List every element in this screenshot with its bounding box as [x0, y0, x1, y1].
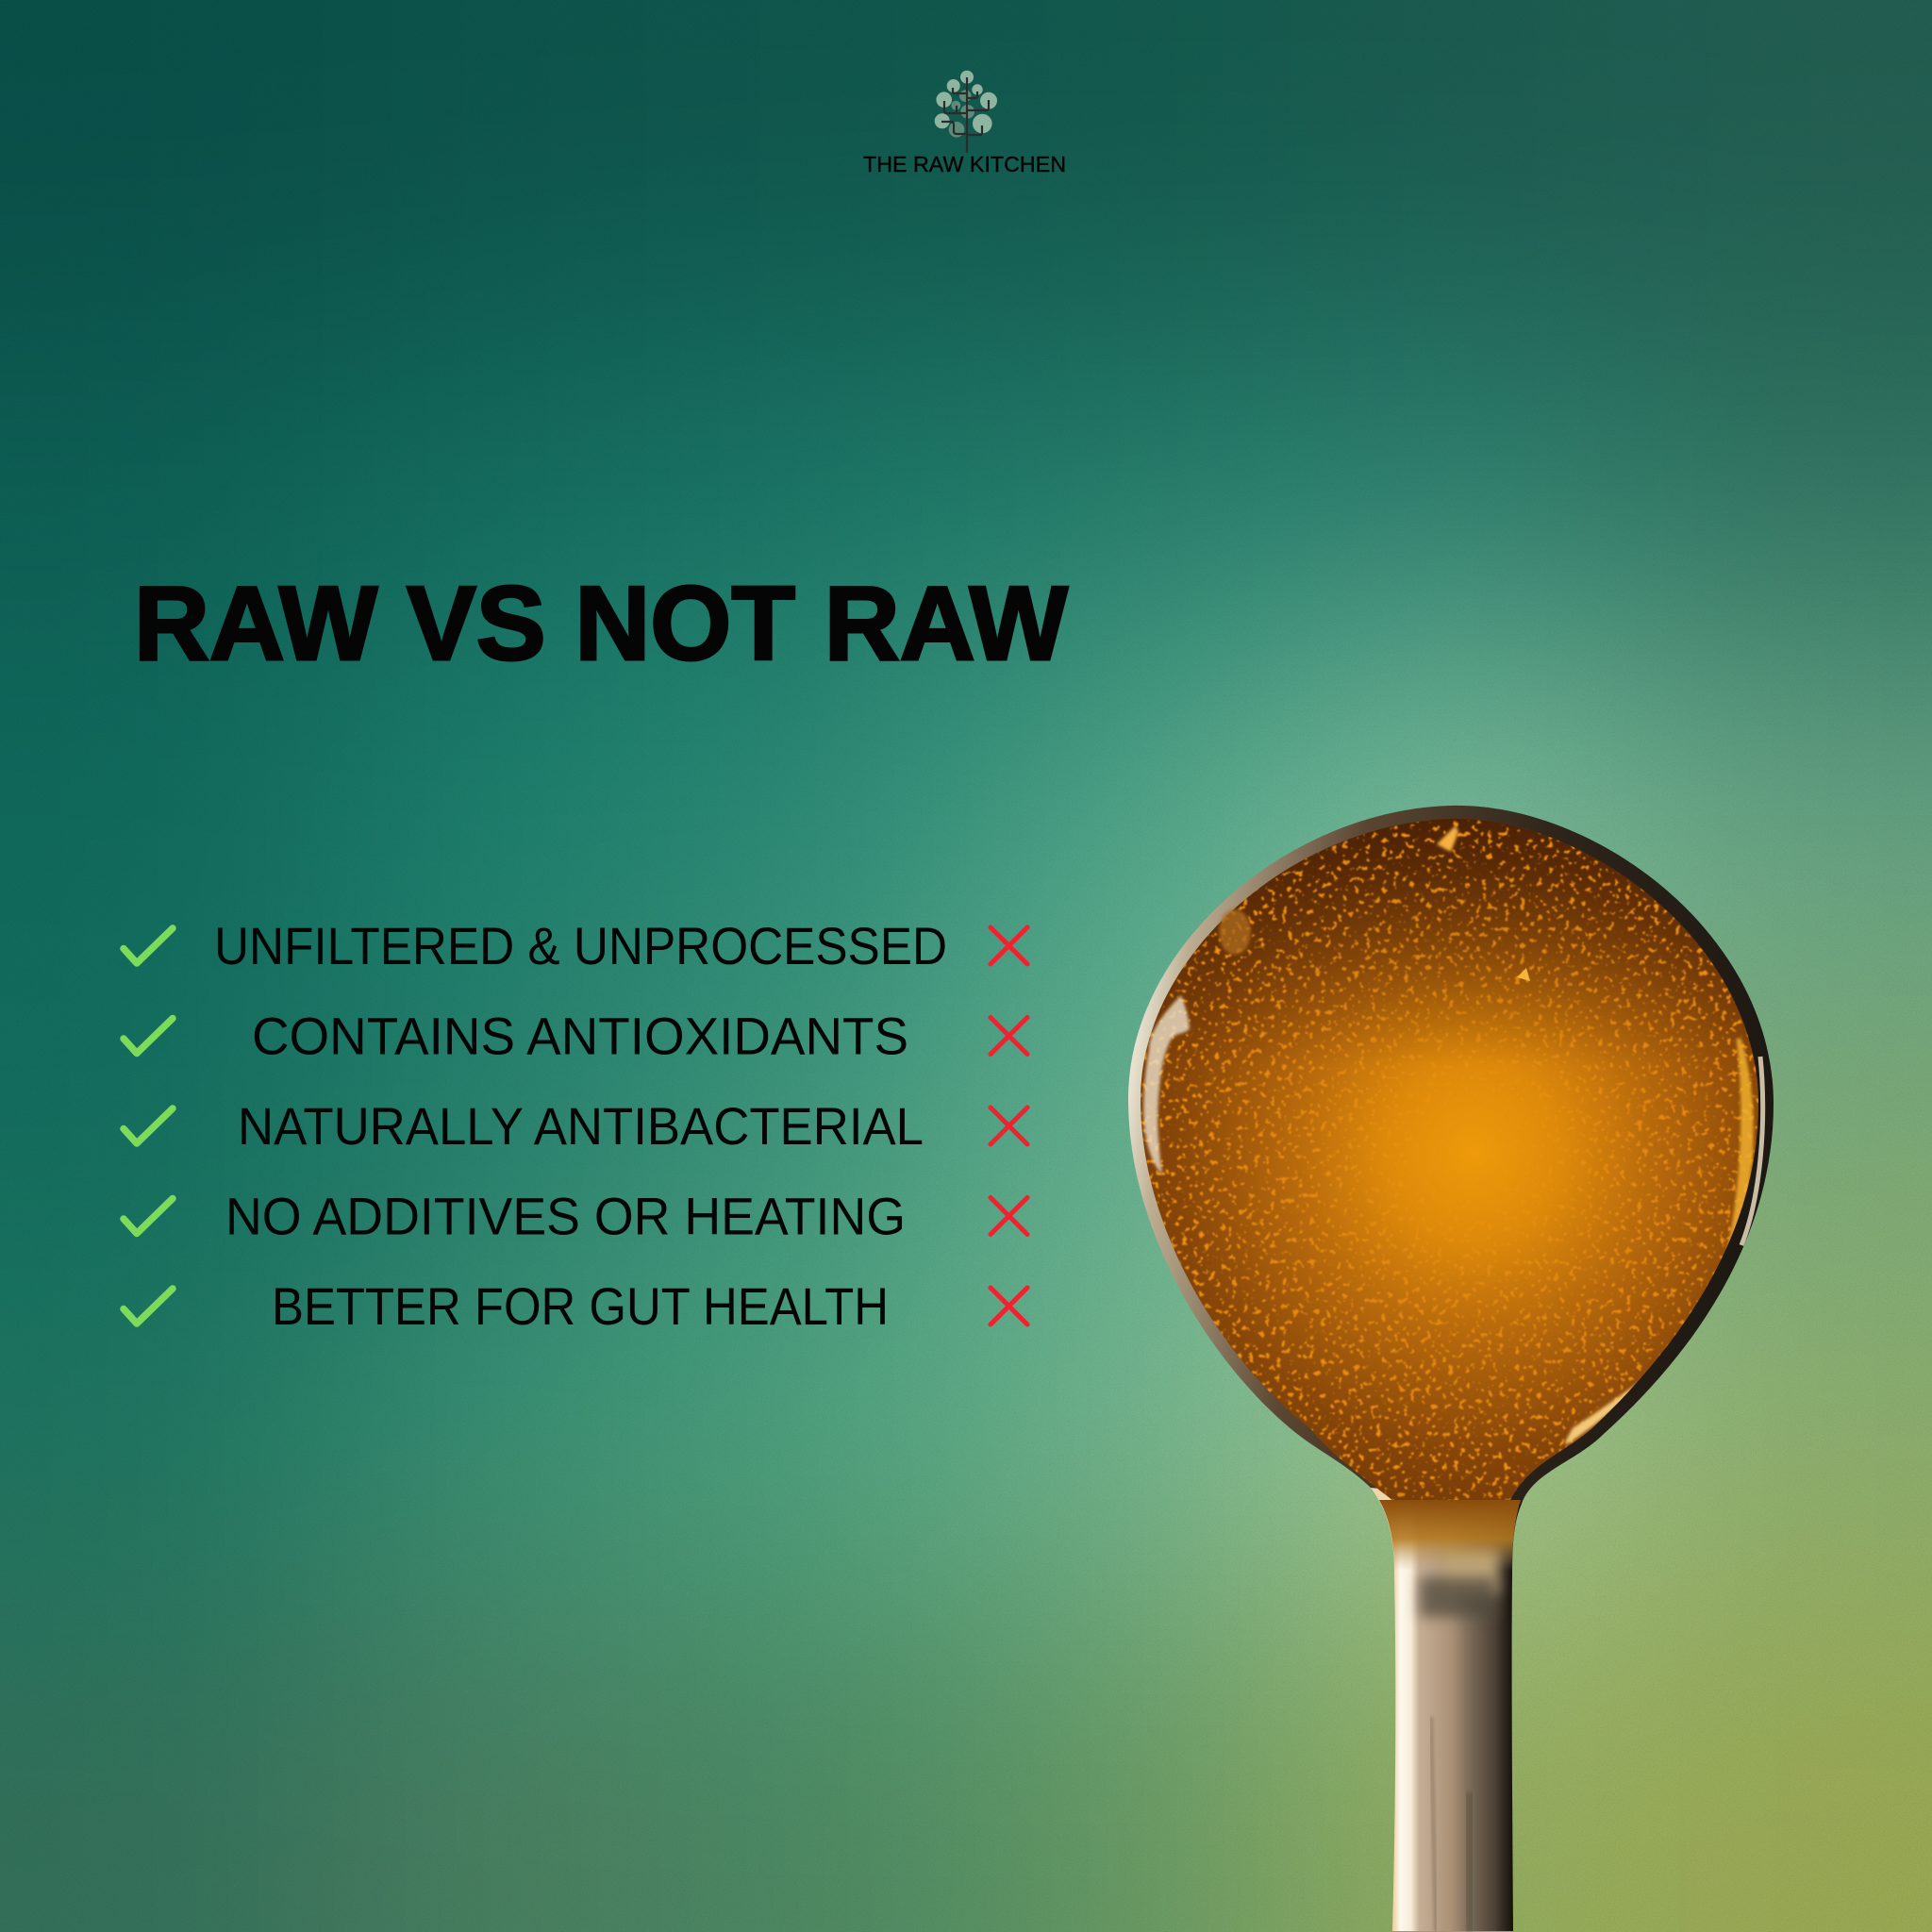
row: antioxidants [124, 1006, 1027, 1066]
highlight: left reflection [1143, 995, 1190, 1174]
label: CONTAINS ANTIOXIDANTS [252, 1006, 908, 1066]
icon: cross [991, 1198, 1027, 1234]
icon: check [124, 1289, 173, 1324]
spoon rim [1128, 806, 1774, 1504]
rim reflection: right [1741, 1057, 1763, 1245]
comparison list [124, 916, 1027, 1336]
row: unfiltered [124, 916, 1027, 975]
highlight: top glint [1437, 825, 1458, 852]
icon: cross [991, 1288, 1027, 1324]
spoon handle [1371, 1488, 1522, 1931]
icon: cross [991, 927, 1027, 964]
icon: check [124, 1019, 173, 1053]
honey pool [1141, 819, 1758, 1500]
spoon with honey [1128, 806, 1774, 1932]
row: no additives [124, 1187, 1027, 1245]
label: NO ADDITIVES OR HEATING [225, 1187, 906, 1245]
glint: lower right [1566, 1378, 1647, 1443]
honey fading onto neck [1379, 1500, 1521, 1571]
bright fleck [1517, 968, 1530, 981]
row: gut health [124, 1276, 1027, 1336]
label: BETTER FOR GUT HEALTH [272, 1276, 889, 1336]
glint: right edge [1729, 1039, 1751, 1250]
row: antibacterial [124, 1096, 1027, 1156]
icon: check [124, 1198, 173, 1234]
brand name: THE RAW KITCHEN [863, 152, 1066, 176]
title: RAW VS NOT RAW [134, 565, 1068, 682]
label: UNFILTERED & UNPROCESSED [214, 916, 947, 975]
icon: cross [991, 1017, 1027, 1055]
bubble [1219, 909, 1251, 955]
icon: tree [935, 71, 997, 153]
icon: check [124, 1108, 173, 1143]
icon: cross [991, 1108, 1027, 1144]
label: NATURALLY ANTIBACTERIAL [238, 1096, 924, 1156]
icon: check [124, 928, 173, 963]
logo: The Raw Kitchen [863, 71, 1066, 176]
